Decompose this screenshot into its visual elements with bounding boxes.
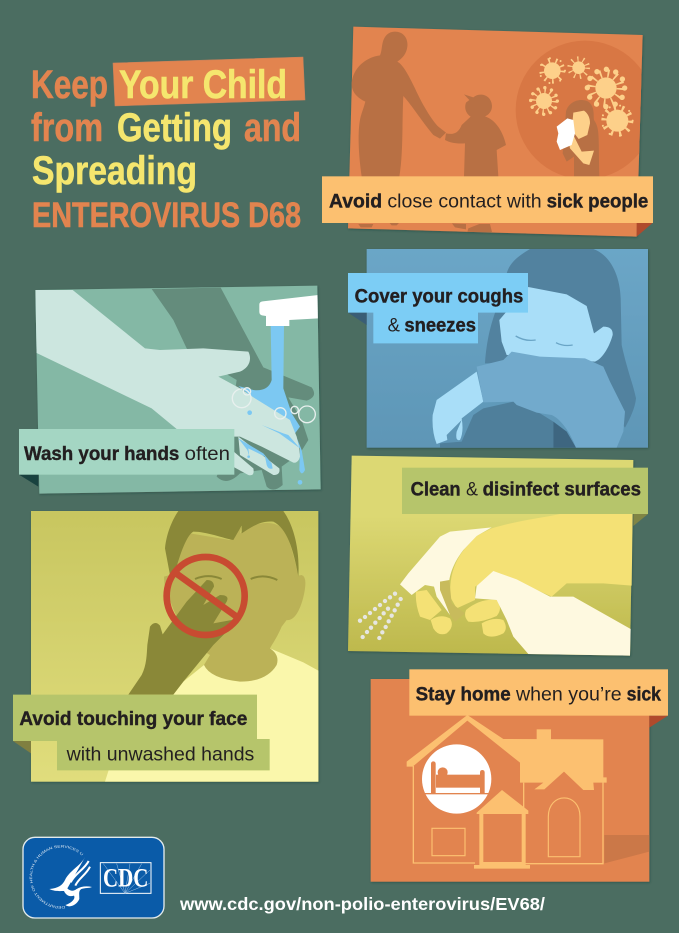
sleeve <box>477 352 625 448</box>
eyebrows <box>195 576 277 580</box>
panel: avoid close contact <box>322 27 654 237</box>
title: ENTEROVIRUS D68 <box>32 196 301 235</box>
child silhouette <box>445 94 506 232</box>
banner <box>19 429 234 475</box>
website url: www.cdc.gov/non-polio-enterovirus/EV68/ <box>179 894 545 914</box>
title: and <box>244 106 301 150</box>
title: from <box>31 106 103 150</box>
panel: clean and disinfect <box>348 456 648 656</box>
fold <box>633 514 648 526</box>
banner: & <box>388 316 400 337</box>
banner <box>348 273 528 343</box>
title highlight box <box>113 57 305 106</box>
banner: disinfect surfaces <box>483 479 641 500</box>
fold <box>649 716 668 728</box>
banner <box>409 669 668 716</box>
porch <box>477 790 528 814</box>
hair <box>485 249 636 428</box>
face <box>499 287 613 362</box>
fold <box>348 313 367 325</box>
logo: HHS and CDC <box>22 836 165 919</box>
CDC box: CDC <box>103 864 148 893</box>
spray bottle head <box>400 527 492 615</box>
banner: Wash your hands <box>24 444 179 465</box>
HHS seal text: DEPARTMENT OF HEALTH & HUMAN SERVICES USA <box>30 845 84 909</box>
banner: Cover your coughs <box>355 287 523 308</box>
title: Your Child <box>119 63 287 107</box>
banner <box>13 695 270 770</box>
soap bubbles <box>232 388 315 423</box>
title <box>31 57 305 235</box>
panel: avoid touching face <box>13 511 318 782</box>
banner: sick people <box>547 191 649 212</box>
fingers <box>416 590 506 637</box>
fold <box>19 475 38 487</box>
banner: Clean <box>411 479 461 500</box>
HHS eagle <box>49 857 92 906</box>
spray droplets <box>358 591 403 640</box>
water streaks over fingers <box>238 425 300 469</box>
trigger shadow <box>440 580 465 622</box>
virus circle background <box>516 40 642 176</box>
house icon <box>407 715 607 869</box>
banner: when you’re <box>515 685 622 706</box>
hair <box>165 511 299 577</box>
banner: Avoid <box>329 191 382 212</box>
banner <box>402 468 648 514</box>
panel: stay home <box>371 669 668 882</box>
panel: cover coughs and sneezes <box>348 249 648 448</box>
sick girl <box>557 100 599 177</box>
title: Keep <box>31 63 108 107</box>
hand and forearm <box>432 372 483 444</box>
shirt <box>105 648 318 782</box>
bottle body <box>475 571 631 656</box>
faucet <box>259 295 318 326</box>
house shadow <box>604 835 649 863</box>
running water <box>238 325 305 473</box>
banner: close contact with <box>387 191 542 212</box>
hand <box>128 580 233 695</box>
banner: Avoid touching your face <box>19 709 248 730</box>
banner: sick <box>627 685 661 706</box>
title: Getting <box>117 106 232 150</box>
banner: sneezes <box>404 316 476 337</box>
bed circle <box>422 744 491 814</box>
face and neck <box>164 523 305 682</box>
near arm and hand <box>35 290 300 463</box>
HHS seal text <box>30 845 84 909</box>
title: Spreading <box>32 149 197 193</box>
banner <box>322 176 653 223</box>
panel: wash hands <box>19 286 321 494</box>
fold <box>637 223 653 237</box>
banner: Stay home <box>416 685 511 706</box>
virus icons <box>531 58 633 136</box>
banner: with unwashed hands <box>66 745 254 766</box>
no symbol <box>167 557 245 635</box>
banner: often <box>185 444 230 465</box>
adult silhouette <box>352 32 446 227</box>
far hand <box>152 288 314 490</box>
chest shadow <box>440 402 553 448</box>
fold <box>13 741 31 753</box>
gripping hand <box>450 514 633 608</box>
banner: & <box>466 479 478 500</box>
